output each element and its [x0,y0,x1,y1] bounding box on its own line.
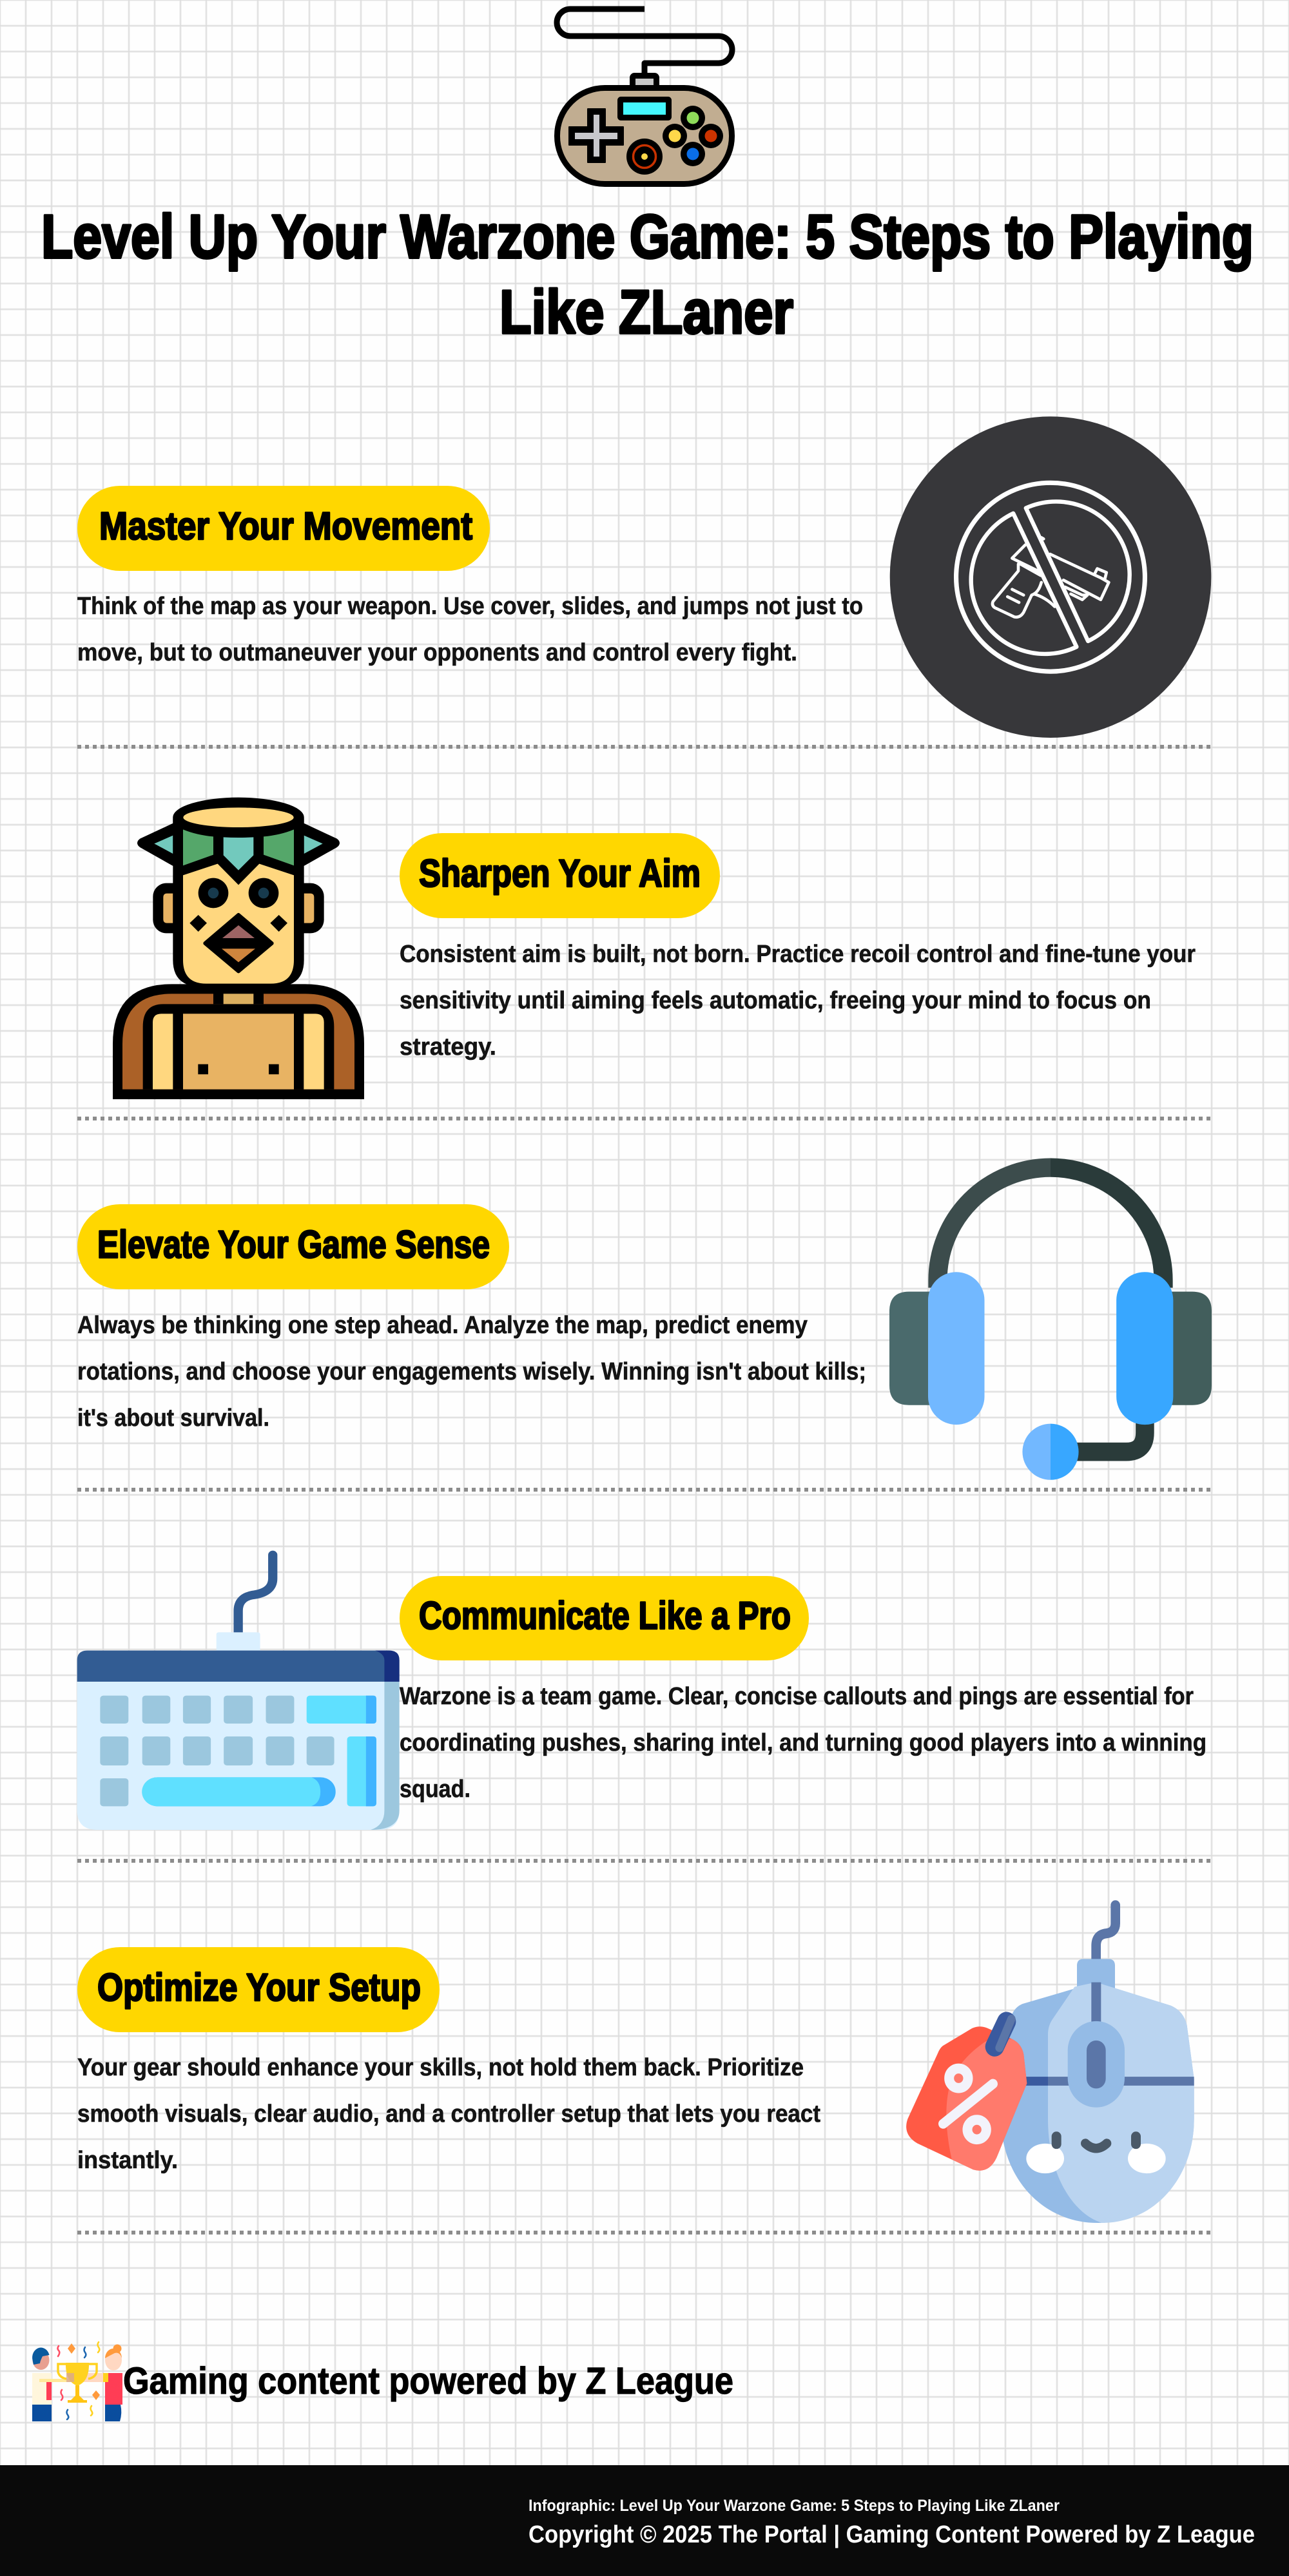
text block: step 4 description: Warzone is a team game. Clear, concise callouts and pings are essential for [400,1683,1194,1710]
text block: step 4 description: coordinating pushes, sharing intel, and turning good players into a winning [400,1729,1207,1756]
panel: step 3 elevate your game sense [77,1168,1212,1480]
panel: step 2 sharpen your aim [113,798,1196,1099]
panel: step 4 communicate like a pro [77,1555,1207,1830]
heading: elevate your game sense [77,1204,509,1289]
icon: no guns sign [890,416,1211,738]
text block: step 1 description [77,593,863,666]
icon: mouse with price tag [906,1905,1194,2223]
heading: master your movement: Master Your Movement [99,505,472,548]
heading: master your movement [77,486,490,571]
text block: step 3 description: it's about survival. [77,1405,269,1432]
text block: step 3 description: rotations, and choose your engagements wisely. Winning isn't about kills; [77,1358,866,1385]
panel: footer [0,2465,1289,2576]
title: Like ZLaner [499,278,793,347]
heading: communicate like a pro: Communicate Like a Pro [419,1594,791,1637]
icon: game controller [557,9,732,184]
text block: step 1 description: move, but to outmaneuver your opponents and control every fight. [77,639,797,666]
heading: communicate like a pro [400,1576,809,1660]
text block: step 3 description [77,1312,866,1432]
text block: step 2 description: Consistent aim is built, not born. Practice recoil control and fine-tune your [400,941,1196,968]
heading: optimize your setup [77,1947,440,2032]
title [41,202,1254,347]
heading: sharpen your aim: Sharpen Your Aim [419,852,701,895]
text block: step 2 description: sensitivity until aiming feels automatic, freeing your mind to focus on [400,987,1151,1014]
icon: tribal mask character [113,798,364,1099]
icon: headset [889,1168,1212,1480]
text block: step 2 description [400,941,1196,1061]
text block: step 4 description: squad. [400,1776,470,1803]
text block: step 1 description: Think of the map as your weapon. Use cover, slides, and jumps not just to [77,593,863,620]
text block: infographic caption: Infographic: Level Up Your Warzone Game: 5 Steps to Playing Like ZLaner [528,2497,1060,2515]
text block: powered by: Gaming content powered by Z League [123,2360,733,2402]
panel: step 5 optimize your setup [77,1905,1194,2223]
text block: step 5 description: Your gear should enhance your skills, not hold them back. Prioritize [77,2054,804,2081]
heading: optimize your setup: Optimize Your Setup [97,1966,421,2009]
text block: step 3 description: Always be thinking one step ahead. Analyze the map, predict enemy [77,1312,808,1339]
heading: elevate your game sense: Elevate Your Game Sense [97,1223,490,1266]
text block: step 5 description [77,2054,820,2174]
heading: sharpen your aim [400,833,720,918]
panel: step 1 master your movement [77,416,1211,738]
text block: step 5 description: smooth visuals, clear audio, and a controller setup that lets you react [77,2100,820,2128]
icon: trophy with two players [32,2342,122,2421]
icon: keyboard [77,1555,400,1830]
text block: step 4 description [400,1683,1207,1803]
text block: step 2 description: strategy. [400,1033,496,1061]
text block: step 5 description: instantly. [77,2147,178,2174]
